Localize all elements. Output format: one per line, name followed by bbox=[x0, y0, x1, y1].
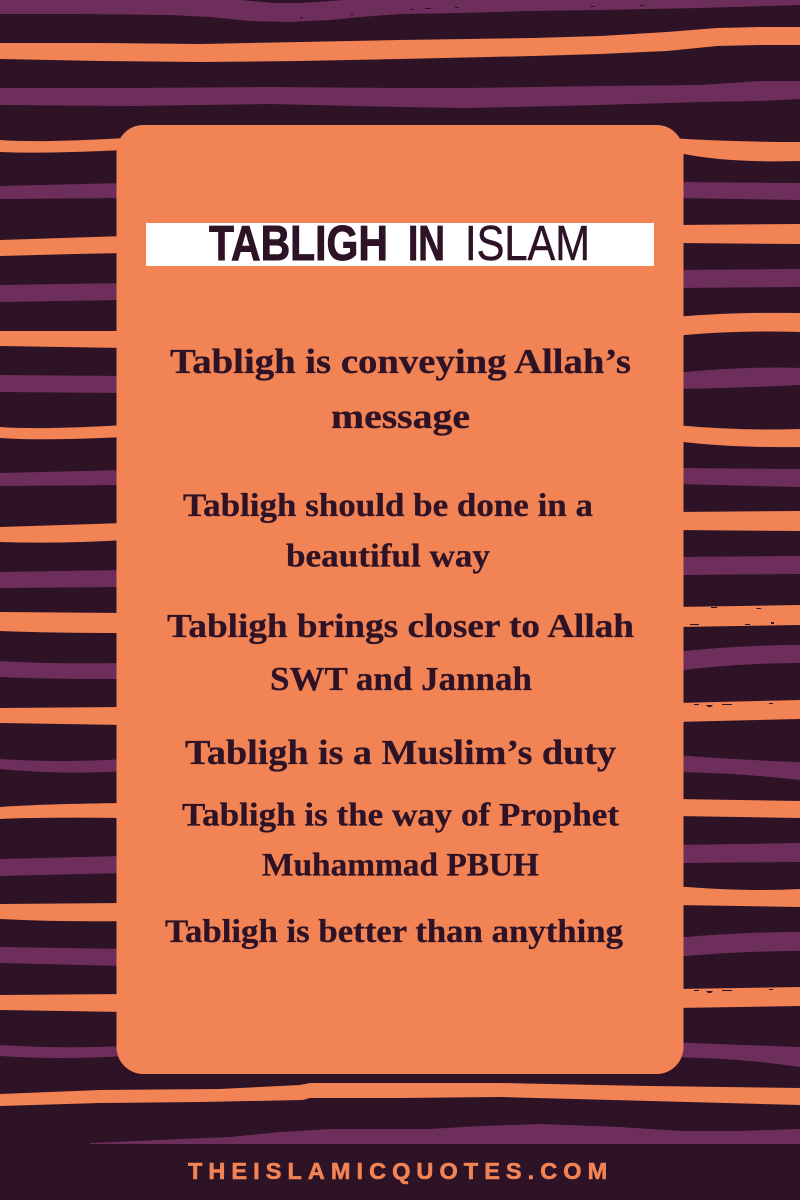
point 1: message bbox=[331, 397, 470, 436]
point 4: Tabligh is a Muslim’s duty bbox=[185, 733, 617, 772]
title banner: TABLIGH bbox=[209, 217, 388, 271]
point 6: Tabligh is better than anything bbox=[165, 914, 624, 950]
right brush stripes bbox=[670, 138, 800, 1067]
point 5 bbox=[182, 798, 619, 884]
footer website: THEISLAMICQUOTES.COM bbox=[188, 1158, 613, 1184]
point 2 bbox=[183, 488, 593, 574]
top brush stripes bbox=[0, 0, 800, 108]
point 3 bbox=[167, 608, 634, 698]
title banner bbox=[146, 217, 654, 271]
point 2: beautiful way bbox=[286, 538, 491, 574]
point 5: Tabligh is the way of Prophet bbox=[182, 798, 619, 834]
point 5: Muhammad PBUH bbox=[262, 848, 539, 884]
point 1: Tabligh is conveying Allah’s bbox=[170, 342, 631, 381]
title banner: IN bbox=[408, 217, 445, 271]
orange content panel bbox=[116, 125, 684, 1074]
point 1 bbox=[170, 342, 631, 436]
bottom brush stripes bbox=[0, 1083, 800, 1144]
point 2: Tabligh should be done in a bbox=[183, 488, 593, 524]
point 3: SWT and Jannah bbox=[270, 661, 532, 698]
point 3: Tabligh brings closer to Allah bbox=[167, 608, 634, 645]
title banner: ISLAM bbox=[465, 217, 590, 271]
left brush stripes bbox=[0, 138, 125, 1058]
